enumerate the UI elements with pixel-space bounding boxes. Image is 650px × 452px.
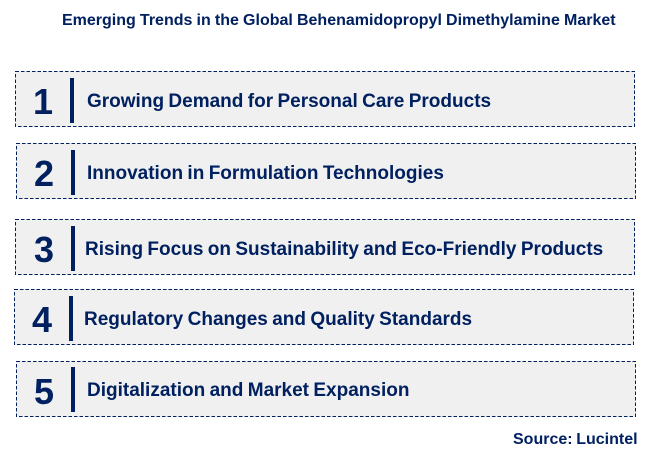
panel: trend 5 (16, 361, 636, 417)
text 3: Rising Focus on Sustainability and Eco-Friendly Products (85, 239, 603, 260)
panel: trend 2 (16, 143, 636, 199)
number 5: 5 (34, 371, 54, 412)
divider bar 2 (71, 150, 75, 195)
number 4: 4 (32, 299, 52, 340)
title: Emerging Trends in the Global Behenamidopropyl Dimethylamine Market (62, 12, 616, 29)
text 1: Growing Demand for Personal Care Products (87, 91, 491, 112)
divider bar 5 (71, 367, 75, 412)
divider bar 4 (69, 296, 73, 341)
divider bar 1 (70, 78, 74, 123)
number 2: 2 (34, 153, 54, 194)
panel: trend 1 (15, 71, 635, 127)
number 3: 3 (34, 229, 54, 270)
number 1: 1 (33, 81, 53, 122)
divider bar 3 (71, 226, 75, 271)
text 5: Digitalization and Market Expansion (87, 380, 409, 401)
text 2: Innovation in Formulation Technologies (87, 163, 444, 184)
panel: trend 4 (14, 289, 634, 345)
text 4: Regulatory Changes and Quality Standards (84, 309, 472, 330)
source: Source: Lucintel (513, 431, 638, 448)
panel: trend 3 (15, 219, 635, 275)
